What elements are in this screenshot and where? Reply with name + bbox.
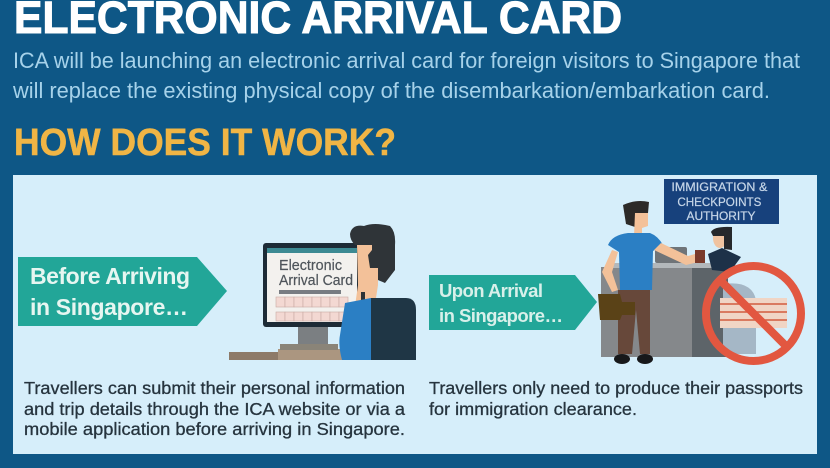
screen text: Electronic xyxy=(279,257,342,274)
caption: before arriving: mobile application before arriving in Singapore. xyxy=(24,419,405,439)
arrow: upon arrival: in Singapore… xyxy=(439,305,563,326)
caption: upon arrival: Travellers only need to produce their passports xyxy=(429,378,803,398)
traveller xyxy=(598,201,705,364)
screen text: Arrival Card xyxy=(279,272,353,289)
intro text: ICA will be launching an electronic arrival card for foreign visitors to Singapore that xyxy=(13,48,801,73)
arrow: upon arrival xyxy=(429,275,597,330)
sign: immigration and checkpoints authority: IMMIGRATION & xyxy=(671,180,767,194)
arrow: before arriving: Before Arriving xyxy=(30,263,190,289)
icon: traveller at computer xyxy=(229,224,416,360)
arrow: upon arrival: Upon Arrival xyxy=(439,280,543,301)
arrow: before arriving xyxy=(18,257,227,326)
icon: no paper card xyxy=(706,266,801,361)
arrow: before arriving: in Singapore… xyxy=(30,294,188,320)
intro text xyxy=(12,48,801,103)
caption: upon arrival: for immigration clearance. xyxy=(429,399,637,419)
caption: before arriving: Travellers can submit their personal information xyxy=(24,378,405,398)
officer xyxy=(708,227,741,272)
panel: how it works xyxy=(13,175,817,454)
sign: immigration and checkpoints authority: AUTHORITY xyxy=(686,209,756,223)
icon: immigration counter xyxy=(598,179,801,364)
sign: immigration and checkpoints authority xyxy=(664,179,779,224)
sign: immigration and checkpoints authority: CHECKPOINTS xyxy=(677,195,761,209)
head and neck xyxy=(355,245,378,306)
heading: how does it work: HOW DOES IT WORK? xyxy=(14,122,396,164)
caption: before arriving: and trip details through the ICA website or via a xyxy=(24,399,405,419)
intro text: will replace the existing physical copy of the disembarkation/embarkation card. xyxy=(12,78,770,103)
